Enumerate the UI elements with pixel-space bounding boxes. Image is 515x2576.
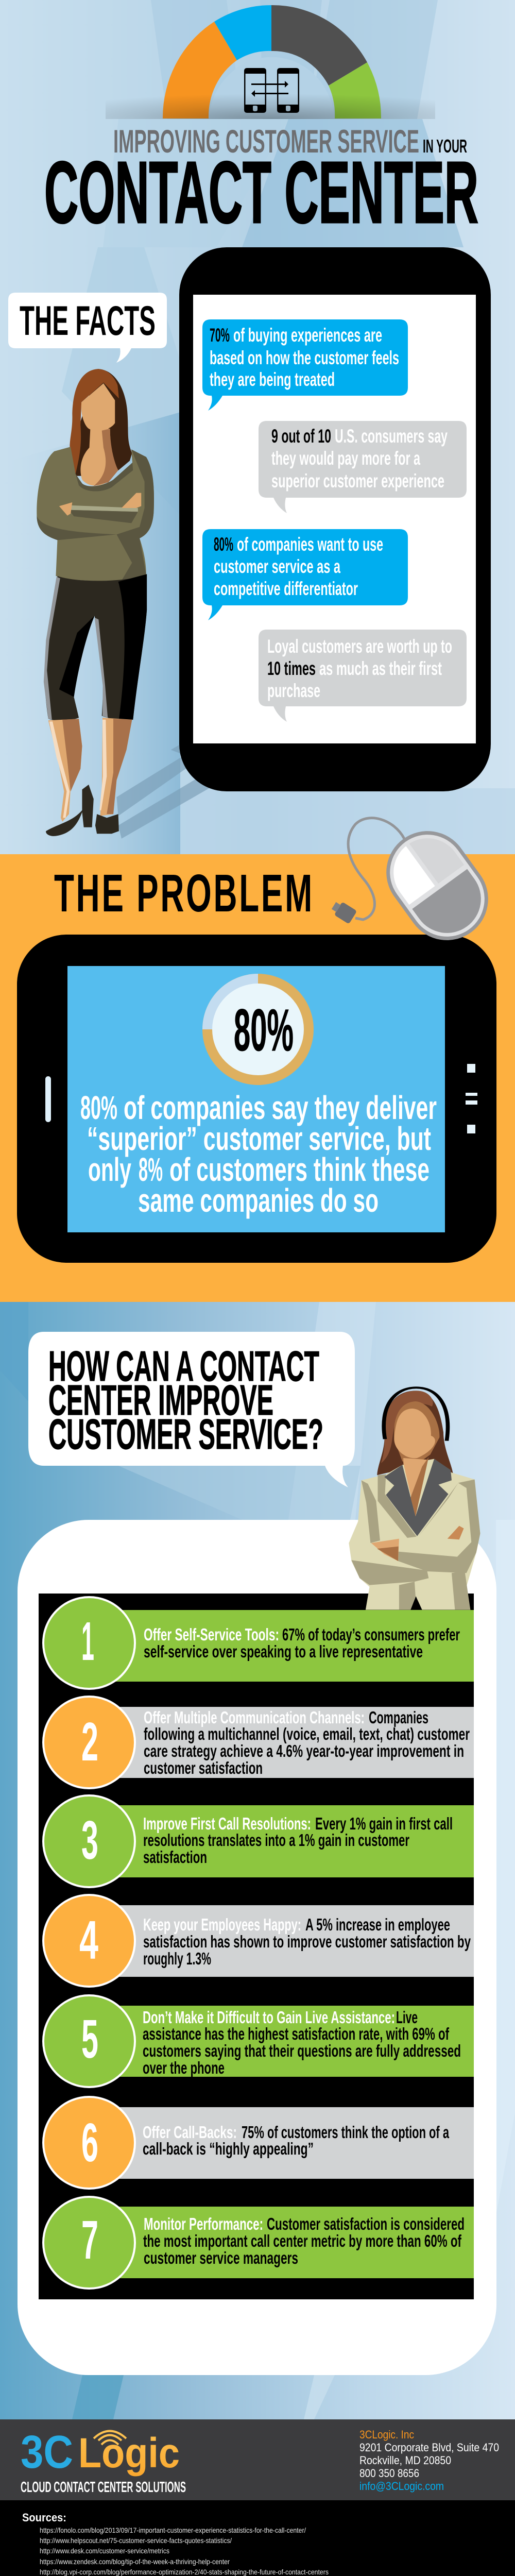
number badge: 1 <box>81 1611 94 1672</box>
contact address: Rockville, MD 20850 <box>359 2454 451 2467</box>
tablet side button <box>45 1076 51 1122</box>
tablet right controls <box>466 1064 477 1133</box>
problem statement: only <box>88 1151 131 1188</box>
number badge: 7 <box>81 2210 98 2270</box>
speech bubble: the facts <box>8 293 167 363</box>
panel: phone with fact bubbles <box>179 247 491 791</box>
speech bubble: how can a contact center improve: CENTER IMPROVE <box>48 1376 273 1424</box>
bar <box>89 2006 474 2077</box>
list item 7 <box>42 2196 474 2290</box>
panel: the problem band <box>0 854 515 1302</box>
text: Offer Multiple Communication Channels: <box>144 1708 365 1727</box>
fact bubble 1: they are being treated <box>210 369 335 390</box>
panel: tablet <box>17 935 496 1263</box>
speech bubble: how can a contact center improve <box>28 1332 355 1487</box>
fact bubble 4 <box>259 630 467 722</box>
text <box>144 1708 470 1777</box>
problem statement: same companies do so <box>138 1182 379 1219</box>
source links: http://www.helpscout.net/75-customer-service-facts-quotes-statistics/ <box>40 2536 232 2545</box>
fact bubble 1: based on how the customer feels <box>210 347 399 368</box>
text: Improve First Call Resolutions: <box>143 1814 311 1833</box>
fact bubble 2: they would pay more for a <box>271 448 420 469</box>
number badge <box>42 2196 136 2290</box>
donut chart: 80%: 80% <box>234 997 294 1063</box>
arch base shadow <box>106 85 435 119</box>
source links: http://www.desk.com/customer-service/metrics <box>40 2547 169 2555</box>
fact bubble 1: of buying experiences are <box>233 325 382 346</box>
logo: 3CLogic: Logic <box>78 2430 180 2477</box>
number badge: 6 <box>81 2112 98 2173</box>
arch segment: blue <box>214 5 271 60</box>
fact bubble 2: U.S. consumers say <box>335 426 448 447</box>
mouse cable <box>348 818 404 920</box>
arch segment: orange <box>163 22 237 118</box>
contact address: 3CLogic. Inc <box>359 2428 414 2441</box>
number badge: 5 <box>81 2009 98 2070</box>
contact address <box>359 2428 499 2493</box>
bar <box>89 1905 474 1977</box>
number badge <box>42 2096 136 2190</box>
fact bubble 1: 70% <box>210 325 230 346</box>
fact bubble 3: 80% <box>214 534 233 555</box>
source links: http://blog.vpi-corp.com/blog/performance-optimization-2/40-stats-shaping-the-future-of-contact-centers <box>40 2568 329 2576</box>
logo: 3CLogic: CLOUD CONTACT CENTER SOLUTIONS <box>21 2479 186 2496</box>
fact bubble 1 <box>202 319 408 411</box>
contact address: 9201 Corporate Blvd, Suite 470 <box>359 2441 499 2454</box>
fact bubble 3: of companies want to use <box>237 534 383 555</box>
number badge <box>42 1894 136 1988</box>
source links: https://www.zendesk.com/blog/tip-of-the-week-a-thriving-help-center <box>40 2557 230 2566</box>
fact bubble 2: 9 out of 10 <box>271 426 331 447</box>
list item 6 <box>42 2096 474 2190</box>
text: over the phone <box>143 2058 225 2077</box>
text <box>143 1814 453 1867</box>
text: customer satisfaction <box>144 1758 263 1777</box>
text: Don’t Make it Difficult to Gain Live Assistance: <box>143 2008 395 2027</box>
fact bubble 4: 10 times <box>267 658 316 679</box>
fact bubble 2 <box>259 421 467 513</box>
woman with headset <box>349 1387 480 1610</box>
list item 4 <box>42 1894 474 1988</box>
source links <box>40 2526 329 2576</box>
bar <box>89 1707 474 1778</box>
sources heading: Sources: <box>22 2511 66 2524</box>
number badge <box>42 1696 136 1789</box>
donut chart: 80% <box>202 974 314 1085</box>
number badge: 3 <box>81 1810 98 1871</box>
arch segment: dark grey <box>271 5 367 86</box>
text <box>143 2214 465 2267</box>
title: IN YOUR <box>423 135 467 157</box>
icon: wifi arcs <box>94 2431 126 2445</box>
number badge: 2 <box>81 1711 98 1772</box>
footer band <box>0 2419 515 2500</box>
logo: 3CLogic: 3C <box>21 2427 73 2478</box>
source links: https://fonolo.com/blog/2013/09/17-important-customer-experience-statistics-for-the-call-center/ <box>40 2526 306 2534</box>
arrow: left <box>251 90 288 97</box>
speech bubble: how can a contact center improve: HOW CAN A CONTACT <box>48 1342 319 1390</box>
text: Keep your Employees Happy: <box>143 1915 301 1934</box>
phone screen <box>39 1594 474 2299</box>
tablet body <box>17 935 496 1263</box>
bar <box>89 1610 474 1682</box>
text <box>144 1625 460 1661</box>
text: Live <box>396 2008 418 2027</box>
text: Monitor Performance: <box>144 2214 263 2233</box>
phone screen <box>193 295 476 743</box>
bar <box>89 2207 474 2278</box>
number badge: 4 <box>79 1910 98 1971</box>
number badge <box>42 1794 136 1888</box>
speech bubble: how can a contact center improve: CUSTOMER SERVICE? <box>48 1410 323 1458</box>
bar <box>89 1805 474 1877</box>
icon: computer mouse with cable <box>332 817 488 940</box>
text: Companies <box>369 1708 428 1727</box>
problem statement <box>80 1089 437 1219</box>
sources panel <box>0 2500 515 2576</box>
arrow: right <box>251 81 288 88</box>
fact bubble 3 <box>202 529 408 620</box>
icon: semicircular arch graphic with phones <box>106 5 435 119</box>
list item 1 <box>42 1596 474 1690</box>
text <box>143 2123 449 2158</box>
fact bubble 3: competitive differentiator <box>214 578 358 599</box>
text: Offer Self-Service Tools: <box>144 1625 279 1644</box>
bar <box>89 2107 474 2179</box>
speech bubble: the facts: THE FACTS <box>20 298 156 344</box>
number badge <box>42 1596 136 1690</box>
fact bubble 4: as much as their first <box>319 658 442 679</box>
arch segment: green <box>329 62 381 118</box>
mouse body <box>386 831 488 940</box>
icon: left phone <box>244 68 266 113</box>
problem statement: 80% <box>80 1089 117 1126</box>
contact address: 800 350 8656 <box>359 2467 419 2480</box>
fact bubble 4: purchase <box>267 680 320 701</box>
arch inner fill <box>209 57 335 118</box>
logo: 3CLogic <box>21 2427 186 2496</box>
list item 2 <box>42 1696 474 1789</box>
panel: white phone with list <box>18 1520 496 2375</box>
fact bubble 3: customer service as a <box>214 556 340 577</box>
list item 3 <box>42 1794 474 1888</box>
text <box>143 1915 471 1968</box>
text: customer service managers <box>144 2248 298 2267</box>
text: Every 1% gain in first call <box>315 1814 453 1833</box>
phone body <box>179 247 491 791</box>
list item 5 <box>42 1994 474 2088</box>
text: satisfaction <box>143 1848 207 1867</box>
contact address: info@3CLogic.com <box>359 2480 444 2493</box>
woman standing with folded arms <box>37 369 214 839</box>
text <box>143 2008 461 2077</box>
icon: right phone <box>277 68 299 113</box>
text: Offer Call-Backs: <box>143 2123 237 2142</box>
text: roughly 1.3% <box>143 1949 211 1968</box>
heading: the problem: THE PROBLEM <box>54 863 314 923</box>
problem statement: 8% <box>139 1151 163 1188</box>
mouse plug <box>330 899 357 924</box>
text: call-back is “highly appealing” <box>143 2139 314 2158</box>
tablet screen <box>67 966 445 1232</box>
phone outline <box>18 1520 496 2375</box>
number badge <box>42 1994 136 2088</box>
